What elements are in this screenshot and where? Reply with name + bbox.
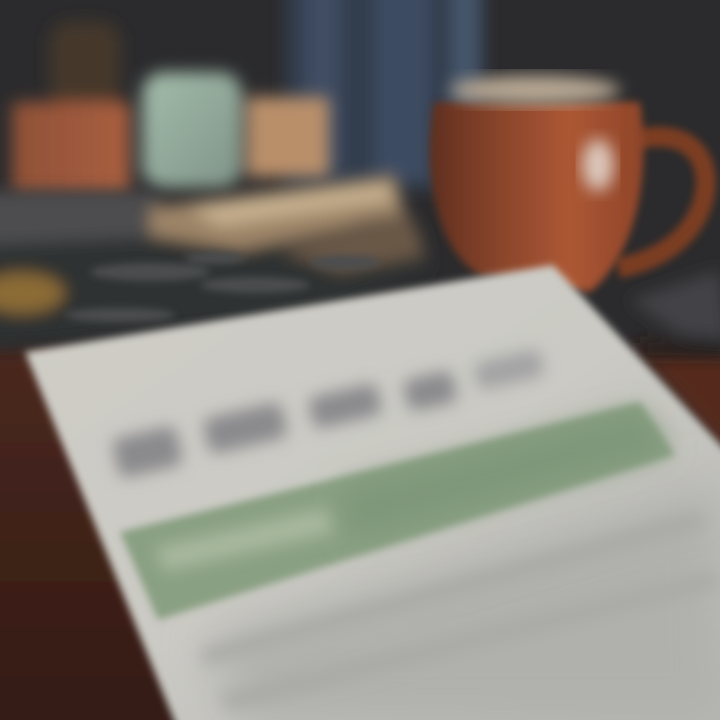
mug body: [430, 102, 643, 292]
clutter speckle: [65, 252, 380, 322]
band darker patch: [340, 410, 670, 540]
mug foam: [450, 75, 620, 105]
icon: orange mug: [430, 75, 706, 292]
mug highlight: [582, 139, 614, 191]
heading smudges: [111, 348, 545, 479]
background objects: bottle and boxes: [12, 22, 329, 194]
stack of books and dark clutter: [0, 174, 430, 345]
green highlighted band: [120, 402, 675, 620]
band label smudge: [155, 508, 335, 572]
right side plate: [630, 270, 720, 356]
mug handle: [618, 137, 706, 268]
table surface: [0, 345, 720, 720]
panel: paper document: [25, 265, 720, 720]
lower paper shading: [210, 480, 720, 720]
body text smudges: [200, 512, 720, 710]
curtain: [285, 0, 485, 190]
